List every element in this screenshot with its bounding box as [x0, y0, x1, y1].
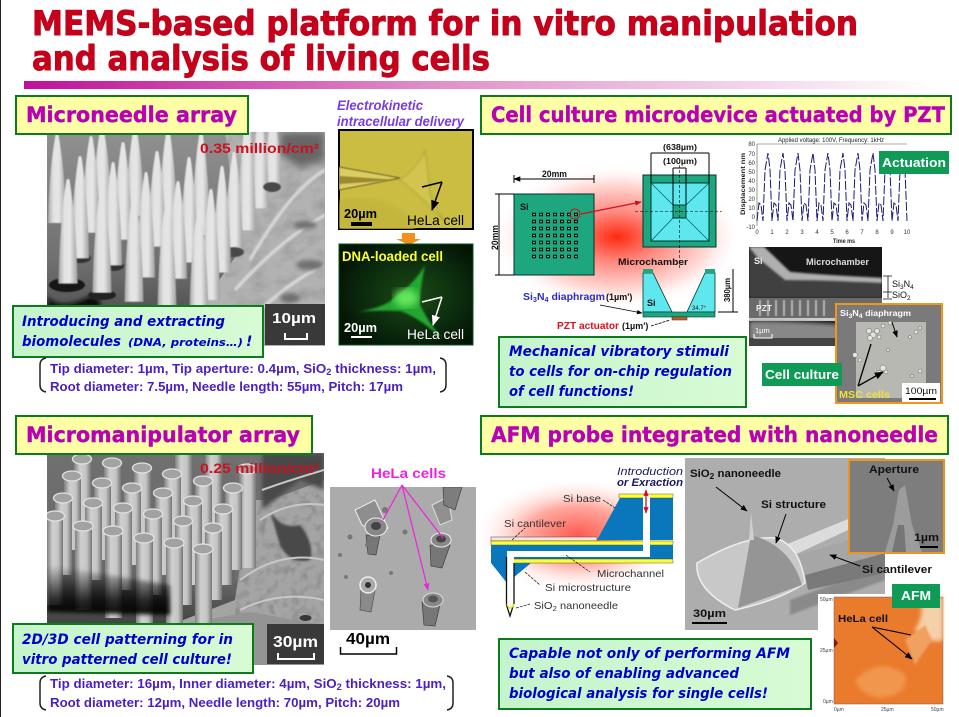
SEM image: probe with nanoneedle: 30µm: [693, 608, 726, 620]
labels: probe parts: [504, 493, 664, 613]
title underline gradient bar: [24, 81, 940, 89]
SEM image: probe with nanoneedle: Si cantilever: [862, 564, 933, 576]
chart: displacement vs time: 7: [860, 230, 864, 236]
label: PZT actuator: (1µm'): [622, 321, 648, 331]
micrograph inset: MSC cells on diaphragm: 100µm: [905, 386, 937, 396]
callout: 2D/3D cell patterning: [13, 624, 253, 673]
chart: displacement vs time: 0: [752, 215, 756, 221]
callout: mechanical vibratory stimuli: of cell functions!: [509, 384, 634, 400]
AFM image: HeLa cell topography: 25µm: [820, 648, 833, 654]
panel: AFM probe with nanoneedle: [473, 416, 948, 713]
specs: microneedle dimensions: thickness: 1µm,: [331, 361, 436, 376]
tag: AFM: [892, 584, 940, 608]
diagram: chamber top view: [635, 142, 722, 270]
label: Si3N4 diaphragm: (1µm'): [606, 292, 632, 302]
chart: displacement vs time: 10: [904, 230, 911, 236]
labels: probe parts: nanoneedle: [557, 600, 618, 612]
specs: microneedle dimensions: 2: [326, 367, 331, 377]
AFM image: HeLa cell topography: 50µm: [931, 707, 944, 713]
heading: micromanipulator array: Micromanipulator array: [26, 423, 300, 447]
specs: micromanipulator dimensions: 2: [337, 682, 342, 692]
diagram: chamber cross section: Si: [647, 298, 656, 308]
SEM cross section: PZT device: Si: [892, 279, 900, 289]
chart: displacement vs time: 9: [890, 230, 894, 236]
label: introduction or extraction: [617, 466, 683, 489]
fluorescence micrograph: DNA-loaded cell: 20µm: [344, 320, 377, 335]
SEM cross section: PZT device: N: [904, 279, 910, 289]
callout: capable of AFM and single cell analysis: [499, 639, 811, 709]
chart: displacement vs time: 40: [748, 179, 756, 185]
chart: displacement vs time: 0: [755, 230, 759, 236]
chart: displacement vs time: 6: [845, 230, 849, 236]
label: Si3N4 diaphragm: [523, 292, 642, 313]
title: and analysis of living cells: [32, 39, 490, 79]
specs: micromanipulator dimensions: thickness: 1µm,: [342, 676, 446, 691]
heading: AFM probe: AFM probe integrated with nanoneedle: [491, 423, 938, 447]
scale bar 40µm: [340, 631, 396, 654]
label: Si3N4 diaphragm: Si: [523, 292, 532, 303]
callout: 2D/3D cell patterning: vitro patterned cell culture!: [22, 652, 232, 668]
micrograph inset: MSC cells on diaphragm: [836, 304, 942, 403]
fluorescence micrograph: DNA-loaded cell: [339, 244, 473, 345]
AFM image: HeLa cell topography: 25µm: [881, 707, 894, 713]
callout: mechanical vibratory stimuli: Mechanical vibratory stimuli: [509, 344, 729, 360]
labels: probe parts: SiO: [534, 600, 552, 612]
SEM cross section: PZT device: PZT: [756, 303, 773, 313]
panel: HeLa cells on micromanipulators: [330, 465, 476, 654]
labels: probe parts: 2: [553, 604, 557, 613]
SEM cross section: PZT device: Microchamber: [806, 257, 869, 267]
callout: capable of AFM and single cell analysis: Capable not only of performing AFM: [509, 646, 790, 662]
SEM inset: aperture: Aperture: [869, 464, 919, 476]
SEM cross section: PZT device: 2: [907, 295, 911, 302]
chart: displacement vs time: 60: [748, 161, 756, 167]
specs: microneedle dimensions: Tip diameter: 1µm, Tip aperture: 0.4µm, SiO: [50, 361, 318, 376]
callout: 2D/3D cell patterning: 2D/3D cell patterning for in: [22, 632, 233, 648]
labels: probe parts: Si cantilever: [504, 518, 567, 530]
tag: cell culture: [762, 363, 842, 386]
scale bar box 30µm: 30µm: [273, 634, 318, 651]
SEM image: probe with nanoneedle: [685, 458, 933, 630]
label: Si3N4 diaphragm: 3: [533, 297, 537, 304]
chart: displacement vs time: 70: [748, 152, 756, 158]
label: PZT actuator: [557, 320, 670, 332]
diagram: chip top view: 20mm: [542, 169, 567, 179]
specs: micromanipulator dimensions: [40, 676, 453, 710]
heading: microneedle array: Microneedle array: [26, 103, 237, 127]
AFM image: HeLa cell topography: [818, 594, 944, 713]
panel: electrokinetic intracellular delivery: [337, 97, 473, 345]
scale bar box 10µm: 10µm: [272, 310, 316, 327]
callout: introducing and extracting biomolecules: (DNA, proteins…): [128, 336, 243, 349]
chart: displacement vs time: 10: [748, 206, 756, 212]
SEM image: HeLa cells: [330, 487, 476, 630]
specs: microneedle dimensions: Root diameter: 7.5µm, Needle length: 55µm, Pitch: 17µm: [50, 379, 403, 394]
chart: displacement vs time: Applied voltage: 100V, Frequency: 1kHz: [778, 137, 884, 144]
scale bar box 30µm: [267, 624, 324, 664]
SEM image: probe with nanoneedle: nanoneedle: [714, 468, 781, 480]
arrows: HeLa cells pointers: [383, 485, 443, 590]
SEM inset: aperture: [849, 460, 944, 553]
micrograph inset: MSC cells on diaphragm: 4: [859, 313, 863, 320]
micrograph inset: MSC cells on diaphragm: N: [852, 308, 859, 318]
heading: micromanipulator array: [16, 416, 312, 454]
chart: displacement vs time: 50: [748, 170, 756, 176]
SEM cross section: PZT device: Si: [754, 256, 763, 266]
chart: displacement vs time: 1: [770, 230, 774, 236]
AFM image: HeLa cell topography: 0µm: [823, 699, 833, 705]
heading: cell culture microdevice: [481, 96, 951, 134]
chart: displacement vs time: 5: [830, 230, 834, 236]
panel: cell culture microdevice: [481, 96, 951, 407]
callout: introducing and extracting biomolecules: biomolecules: [22, 334, 121, 350]
diagram: chamber top view: (100µm): [663, 156, 697, 166]
labels: probe parts: Microchannel: [597, 568, 664, 580]
diagram: chip top view: Si: [520, 202, 529, 212]
labels: probe parts: Si base: [563, 493, 601, 505]
label: introduction or extraction: Introduction: [617, 466, 683, 478]
callout: mechanical vibratory stimuli: to cells for on-chip regulation: [509, 364, 732, 380]
bright-field micrograph with HeLa cell: 20µm: [344, 206, 377, 221]
tag: cell culture: Cell culture: [765, 368, 839, 382]
labels: probe parts: Si microstructure: [545, 582, 631, 594]
specs: micromanipulator dimensions: Root diameter: 12µm, Needle length: 70µm, Pitch: 20µm: [50, 695, 400, 710]
panel: micromanipulator array: [13, 416, 453, 710]
label: PZT actuator: PZT actuator: [557, 321, 619, 332]
callout: introducing and extracting biomolecules: Introducing and extracting: [22, 314, 225, 330]
specs: micromanipulator dimensions: Tip diameter: 16µm, Inner diameter: 4µm, SiO: [50, 676, 329, 691]
diagram: probe cross section: [491, 490, 673, 616]
chart: displacement vs time: 2: [785, 230, 789, 236]
callout: capable of AFM and single cell analysis: biological analysis for single cells!: [509, 686, 768, 702]
label: introduction or extraction: or Exraction: [617, 477, 683, 489]
SEM image: probe with nanoneedle: SiO: [690, 468, 709, 480]
diagram: chamber top view: (638µm): [663, 142, 697, 152]
micrograph inset: MSC cells on diaphragm: diaphragm: [863, 308, 911, 318]
SEM image: probe with nanoneedle: Si structure: [761, 499, 826, 511]
specs: microneedle dimensions: [40, 358, 446, 394]
label: HeLa cells: HeLa cells: [371, 465, 446, 481]
title: [32, 4, 858, 79]
label: microchamber: Microchamber: [618, 257, 688, 268]
bright-field micrograph with HeLa cell: [339, 130, 473, 230]
red glow background: [492, 165, 742, 309]
callout: mechanical vibratory stimuli: [499, 337, 746, 407]
fluorescence micrograph: DNA-loaded cell: HeLa cell: [407, 326, 464, 342]
chart: displacement vs time: Time ms: [833, 238, 855, 245]
micrograph inset: MSC cells on diaphragm: MSC cells: [839, 390, 890, 401]
red glow background: [473, 477, 683, 593]
density label: 0.25 million/cm²: [200, 460, 319, 476]
SEM inset: aperture: 1µm: [914, 532, 939, 544]
caption: Electrokinetic: [337, 97, 423, 113]
diagram: chamber cross section: 380µm: [722, 278, 732, 302]
chart: displacement vs time: 80: [748, 142, 756, 148]
diagram: chamber cross section: [643, 269, 738, 320]
chart: displacement vs time: -10: [746, 225, 756, 231]
SEM image: microneedle array: [47, 117, 325, 346]
chart: displacement vs time: 8: [875, 230, 879, 236]
chart: displacement vs time: 20: [748, 197, 756, 203]
heading: AFM probe: [481, 416, 948, 454]
density label: 0.35 million/cm²: [200, 140, 319, 156]
chart: displacement vs time: 3: [800, 230, 804, 236]
AFM image: HeLa cell topography: HeLa cell: [838, 613, 888, 625]
AFM image: HeLa cell topography: 50µm: [820, 597, 833, 603]
arrow: chip to chamber: [581, 202, 641, 214]
scale bar box 10µm: [265, 304, 325, 345]
tag: AFM: AFM: [901, 588, 931, 603]
heading: microneedle array: [16, 96, 248, 134]
arrow: orange down arrow: [396, 233, 421, 245]
SEM image: micromanipulator array: [46, 453, 324, 665]
diagram: chip top view: 20mm: [490, 225, 500, 250]
chart: displacement vs time: 30: [748, 188, 756, 194]
title: MEMS-based platform for in vitro manipulation: [32, 4, 858, 44]
label: Si3N4 diaphragm: diaphragm: [549, 292, 605, 303]
SEM cross section: PZT device: [749, 247, 914, 346]
caption: [337, 97, 465, 129]
caption: intracellular delivery: [337, 113, 465, 129]
SEM cross section: PZT device: 3: [900, 284, 904, 291]
SEM cross section: PZT device: SiO: [892, 290, 907, 300]
callout: introducing and extracting biomolecules: [13, 306, 263, 357]
label: Si3N4 diaphragm: 4: [545, 297, 549, 304]
tag: actuation: Actuation: [882, 155, 946, 170]
fluorescence micrograph: DNA-loaded cell: DNA-loaded cell: [342, 249, 443, 264]
chart: displacement vs time: [740, 137, 911, 245]
AFM image: HeLa cell topography: 0µm: [834, 707, 844, 713]
panel: microneedle array: [13, 96, 446, 394]
tag: actuation: [879, 151, 949, 174]
chart: displacement vs time: Displacement nm: [740, 153, 747, 215]
diagram: chamber cross section: 34.7°: [692, 306, 707, 312]
scale bar 40µm: 40µm: [346, 631, 390, 648]
bright-field micrograph with HeLa cell: HeLa cell: [407, 212, 464, 228]
micrograph inset: MSC cells on diaphragm: Si: [840, 308, 848, 318]
micrograph inset: MSC cells on diaphragm: 3: [848, 313, 853, 320]
callout: introducing and extracting biomolecules: !: [246, 334, 252, 350]
SEM image: probe with nanoneedle: 2: [710, 472, 715, 481]
SEM cross section: PZT device: 4: [910, 284, 914, 291]
SEM cross section: PZT device: 1µm: [755, 326, 770, 335]
chart: displacement vs time: 4: [815, 230, 819, 236]
callout: capable of AFM and single cell analysis: but also of enabling advanced: [509, 666, 740, 682]
label: Si3N4 diaphragm: N: [537, 292, 545, 303]
diagram: chip top view: [490, 169, 594, 275]
